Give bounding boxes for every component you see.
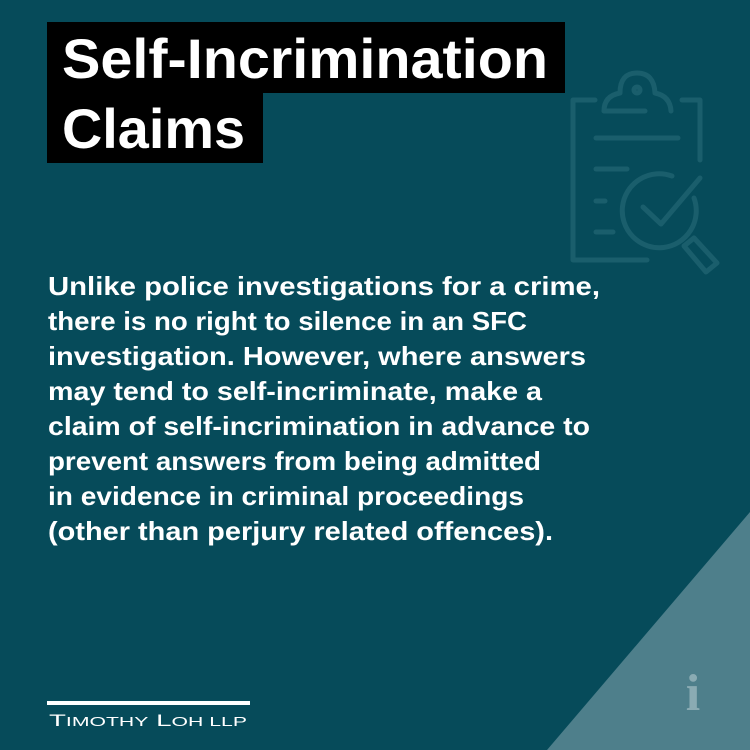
body text: investigation. However, where answers bbox=[48, 341, 586, 371]
decorative triangle corner bbox=[547, 512, 750, 750]
body text bbox=[48, 271, 600, 546]
icon: clipboard with magnifier bbox=[573, 73, 717, 272]
icon: info i: i bbox=[686, 665, 700, 722]
logo: Timothy Loh LLP: T IMOTHY L OH LLP bbox=[49, 711, 247, 730]
body text: there is no right to silence in an SFC bbox=[48, 306, 527, 336]
title: Self-Incrimination bbox=[62, 27, 548, 90]
body text: Unlike police investigations for a crime, bbox=[48, 271, 600, 301]
title bbox=[47, 22, 565, 163]
body text: in evidence in criminal proceedings bbox=[48, 481, 524, 511]
body text: claim of self-incrimination in advance to bbox=[48, 411, 590, 441]
title: Claims bbox=[62, 97, 245, 160]
body text: (other than perjury related offences). bbox=[48, 516, 553, 546]
body text: may tend to self-incriminate, make a bbox=[48, 376, 543, 406]
body text: prevent answers from being admitted bbox=[48, 446, 541, 476]
logo: Timothy Loh LLP bbox=[47, 701, 250, 730]
